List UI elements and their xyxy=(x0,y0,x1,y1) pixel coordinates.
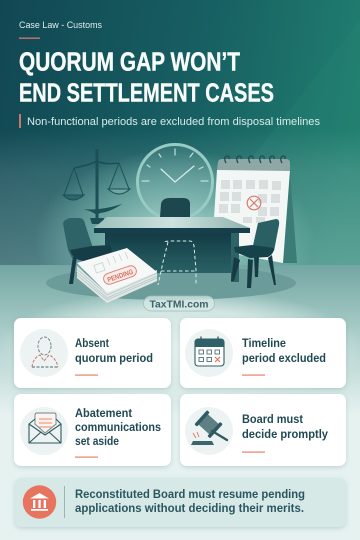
boardroom table xyxy=(94,217,250,282)
illustration: boardroom xyxy=(46,144,297,311)
text: abatement communications set aside: communications xyxy=(75,422,161,434)
panel: board must decide promptly xyxy=(180,394,346,466)
icon: wall clock xyxy=(138,144,212,220)
title: END SETTLEMENT CASES xyxy=(19,80,274,108)
header accent rule xyxy=(19,38,40,39)
text: callout message xyxy=(75,489,305,515)
panel: bottom callout xyxy=(15,478,346,527)
text: timeline period excluded: Timeline xyxy=(242,338,286,350)
text: timeline period excluded: period excluded xyxy=(242,353,326,365)
title xyxy=(19,48,274,108)
text: timeline period excluded xyxy=(242,338,326,365)
text: board must decide promptly: decide promptly xyxy=(242,429,329,441)
right chair xyxy=(231,219,279,288)
TaxTMI pill: TaxTMI.com xyxy=(150,298,208,310)
TaxTMI pill xyxy=(144,296,214,311)
subtitle: Non-functional periods are excluded from disposal timelines xyxy=(27,116,320,128)
text: abatement communications set aside xyxy=(75,408,161,448)
icon: gavel xyxy=(185,407,233,455)
pending papers stack xyxy=(77,248,157,303)
text: absent quorum period: Absent xyxy=(75,338,109,350)
icon: absent person xyxy=(20,329,68,377)
icon: calendar xyxy=(185,329,233,377)
panel: absent quorum period xyxy=(14,318,171,388)
text: callout message: applications without deciding their merits. xyxy=(75,503,304,515)
icon: scales of justice xyxy=(63,149,130,224)
icon: institution building xyxy=(23,485,56,519)
text: absent quorum period xyxy=(75,338,153,365)
text: abatement communications set aside: set aside xyxy=(75,436,119,448)
text: callout message: Reconstituted Board must resume pending xyxy=(75,489,305,501)
text: board must decide promptly: Board must xyxy=(242,414,303,426)
back chair xyxy=(160,198,190,217)
icon: wall calendar xyxy=(212,156,297,263)
header label: Case Law - Customs xyxy=(19,20,102,31)
text: board must decide promptly xyxy=(242,414,329,441)
floor shadow xyxy=(46,266,296,300)
text: abatement communications set aside: Abatement xyxy=(75,408,132,420)
icon: open envelope xyxy=(20,407,68,455)
pending papers stack: PENDING xyxy=(107,269,135,284)
panel: abatement communications set aside xyxy=(14,394,171,466)
title: QUORUM GAP WON’T xyxy=(19,48,240,76)
panel: timeline period excluded xyxy=(180,318,346,388)
text: absent quorum period: quorum period xyxy=(75,353,153,365)
empty seat: dashed chair outline xyxy=(158,241,196,285)
left chair xyxy=(63,218,112,284)
